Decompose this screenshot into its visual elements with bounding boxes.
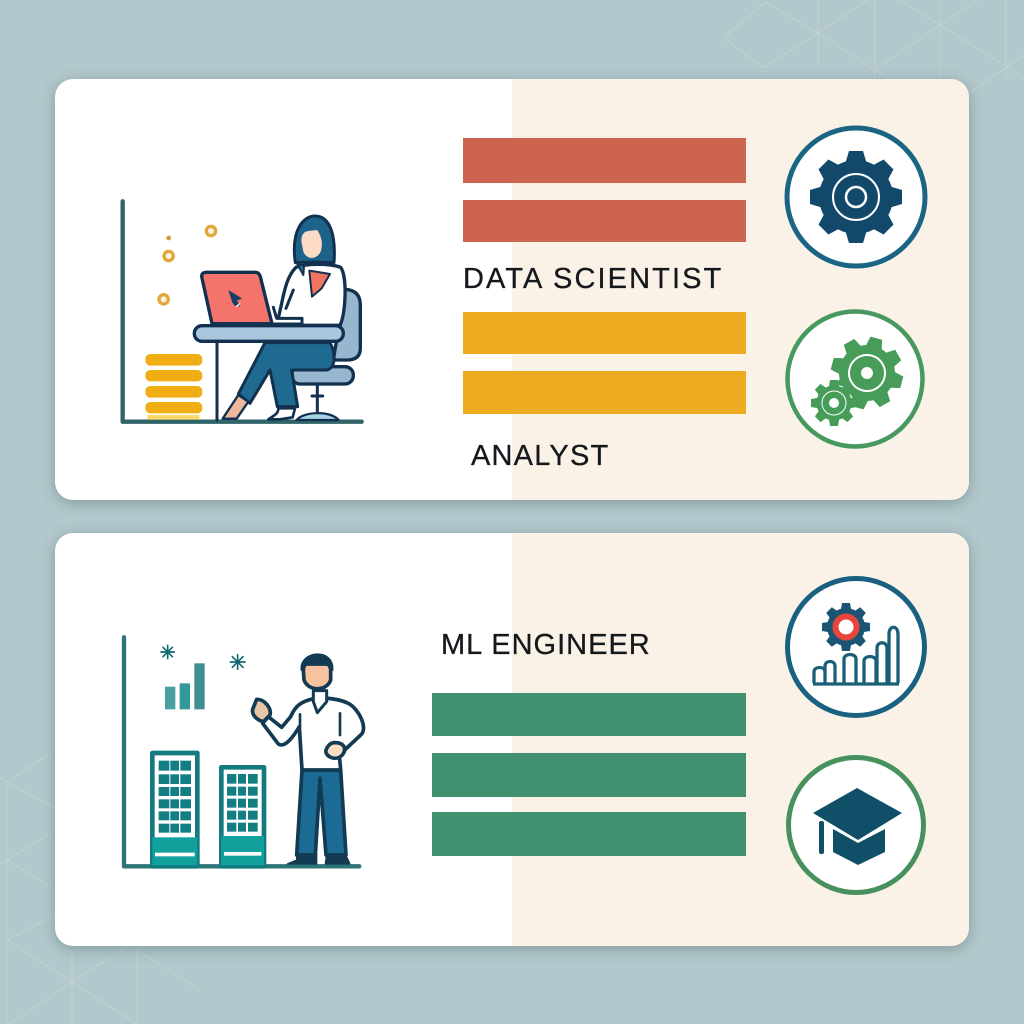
panel: top card — [55, 79, 969, 500]
icon: gear in blue circle — [787, 128, 925, 266]
bar: ml engineer 2 — [432, 753, 746, 797]
illustration: woman at laptop — [123, 201, 362, 422]
man figure — [253, 654, 364, 864]
icon: two gears in green circle — [788, 312, 922, 446]
label: ml engineer: ML ENGINEER — [441, 629, 651, 661]
icon: gear and growth chart — [788, 578, 924, 716]
bar: data scientist 2 — [463, 200, 746, 242]
icon: graduation cap — [788, 758, 924, 892]
icon: small bar chart — [165, 663, 205, 709]
illustration: man with server racks — [124, 637, 364, 866]
bar: data scientist 1 — [463, 138, 746, 183]
bar: analyst 2 — [463, 371, 746, 414]
icon: server rack 1 — [152, 753, 197, 866]
bar: analyst 1 — [463, 312, 746, 354]
panel: bottom card — [55, 533, 969, 946]
label: analyst: ANALYST — [471, 440, 609, 472]
label: data scientist: DATA SCIENTIST — [463, 263, 723, 295]
icon: sparkles — [161, 645, 245, 669]
icon: server rack 2 — [221, 767, 264, 866]
bar: ml engineer 3 — [432, 812, 746, 856]
bar: ml engineer 1 — [432, 693, 746, 736]
